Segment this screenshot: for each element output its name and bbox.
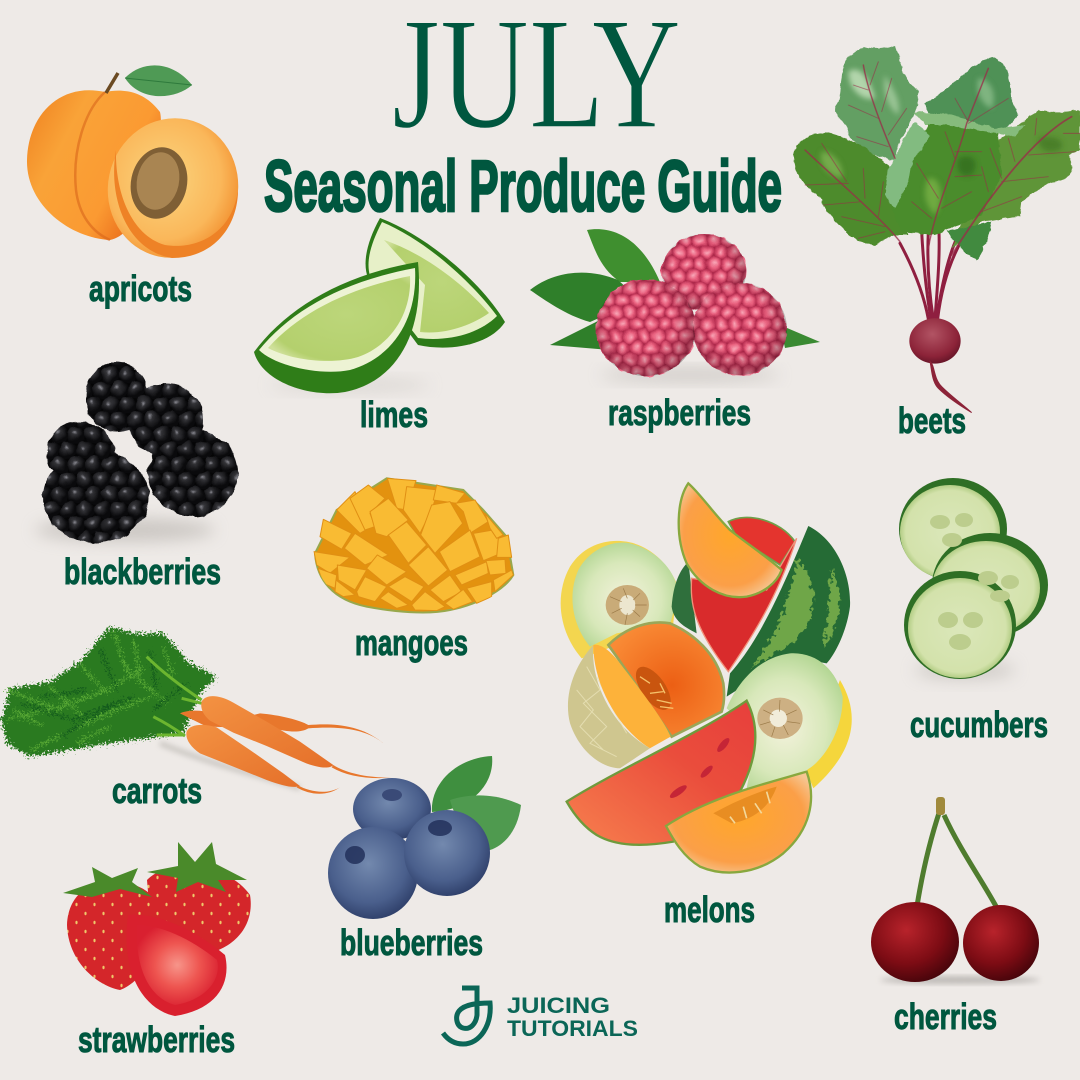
wordmark: TUTORIALS (507, 1016, 638, 1041)
item: strawberries (63, 842, 251, 1060)
label: strawberries: strawberries (78, 1019, 235, 1060)
title (264, 0, 782, 227)
item: cucumbers (899, 478, 1048, 745)
icon: apricots (27, 65, 251, 270)
icon: limes (254, 218, 505, 393)
icon: strawberries (63, 842, 251, 1016)
label: carrots: carrots (112, 770, 202, 811)
icon: logo mark (443, 988, 490, 1044)
honeydew right (727, 653, 852, 788)
item: carrots (2, 627, 392, 811)
honeydew left (561, 541, 677, 658)
item: mangoes (314, 478, 513, 663)
icon: carrots (2, 627, 392, 794)
icon: blueberries (328, 756, 521, 919)
logo: Juicing Tutorials (443, 988, 638, 1044)
label: apricots: apricots (89, 268, 192, 309)
wordmark: JUICING (507, 993, 610, 1018)
label: melons: melons (664, 889, 755, 930)
item: limes (254, 218, 505, 435)
icon: cherries (871, 797, 1040, 984)
label: limes: limes (360, 394, 428, 435)
label: mangoes: mangoes (355, 622, 468, 663)
item: raspberries (530, 229, 820, 433)
icon: melons (561, 483, 852, 873)
icon: mango (314, 478, 513, 612)
wordmark (507, 993, 638, 1041)
item: blackberries (35, 362, 238, 592)
cantaloupe half (568, 622, 724, 768)
watermelon whole (672, 517, 850, 697)
cantaloupe top slice (679, 483, 782, 597)
icon: raspberries (530, 229, 820, 381)
cantaloupe bottom slice (666, 772, 811, 873)
item: melons (561, 483, 852, 930)
icon: beet (793, 45, 1080, 413)
item: beets (793, 45, 1080, 441)
label: blackberries: blackberries (64, 551, 221, 592)
watermelon slice (567, 701, 755, 845)
item: apricots (27, 65, 251, 309)
icon: cucumbers (899, 478, 1048, 680)
label: raspberries: raspberries (608, 392, 751, 433)
label: beets: beets (898, 400, 966, 441)
label: cherries: cherries (894, 996, 997, 1037)
label: blueberries: blueberries (340, 922, 483, 963)
item: blueberries (328, 756, 521, 963)
icon: blackberries (35, 362, 238, 543)
item: cherries (871, 797, 1040, 1037)
